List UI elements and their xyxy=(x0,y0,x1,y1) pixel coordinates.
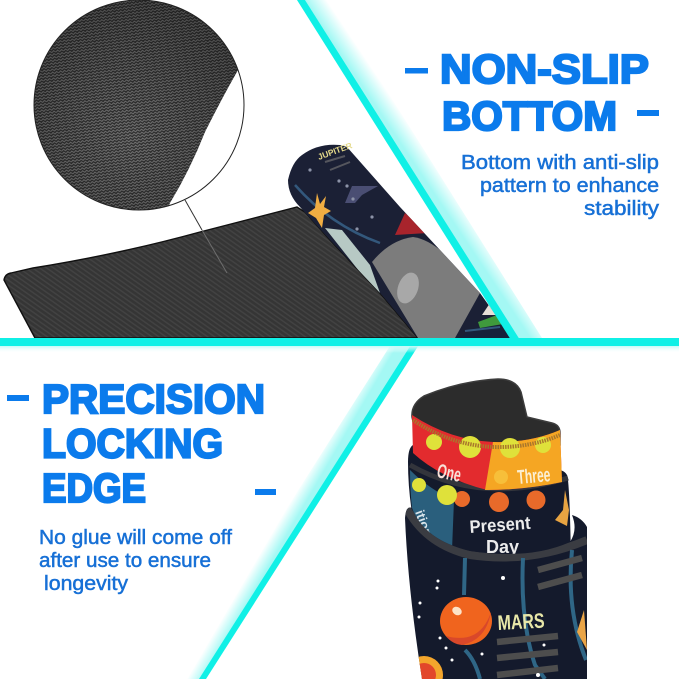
heading: non-slip bottom: BOTTOM xyxy=(442,93,617,139)
mars label: MARS xyxy=(497,610,545,635)
middle layer xyxy=(408,445,571,560)
panel: rolled mat with stitched edge xyxy=(405,379,587,679)
mat underside xyxy=(4,207,418,338)
middle layer: Present xyxy=(469,513,531,537)
outer layer with planets xyxy=(405,505,587,679)
magnified circle: herringbone texture xyxy=(30,0,250,215)
panel: non-slip bottom photo xyxy=(4,0,512,338)
heading: precision locking edge: PRECISION xyxy=(42,376,265,422)
inner roll: dark underside xyxy=(412,379,560,452)
top red and orange band xyxy=(412,415,562,490)
text block: locking edge description xyxy=(39,527,232,595)
text block: locking edge description: longevity xyxy=(44,573,128,595)
text block: non-slip description: stability xyxy=(584,198,659,220)
text block: locking edge description: No glue will come off xyxy=(39,527,232,549)
text block: non-slip description xyxy=(461,152,659,220)
cyan divider, top diagonal xyxy=(297,0,520,340)
middle layer: Day xyxy=(486,537,519,557)
middle layer: ition xyxy=(412,508,436,539)
callout leader line xyxy=(185,200,227,273)
heading: precision locking edge: LOCKING xyxy=(42,420,223,466)
jupiter label: JUPITER xyxy=(316,140,353,162)
text block: locking edge description: after use to ensure xyxy=(39,550,211,572)
icon: mars planet xyxy=(440,597,492,645)
top red and orange band: Three xyxy=(517,464,551,489)
text block: non-slip description: pattern to enhance xyxy=(480,175,659,197)
cyan divider glow, horizontal xyxy=(0,346,679,353)
cyan divider glow, top diagonal xyxy=(305,0,542,338)
heading: non-slip bottom xyxy=(405,46,659,139)
cyan divider, horizontal xyxy=(0,338,679,346)
rolled mat xyxy=(288,140,512,338)
cyan divider, lower diagonal xyxy=(199,340,422,679)
heading: non-slip bottom: NON-SLIP xyxy=(440,46,649,92)
text block: non-slip description: Bottom with anti-slip xyxy=(461,152,659,174)
top red and orange band: One xyxy=(435,460,463,487)
heading: precision locking edge xyxy=(7,376,276,511)
cyan divider glow, lower diagonal xyxy=(178,346,415,679)
icon: star xyxy=(308,193,331,228)
heading: precision locking edge: EDGE xyxy=(42,465,146,511)
